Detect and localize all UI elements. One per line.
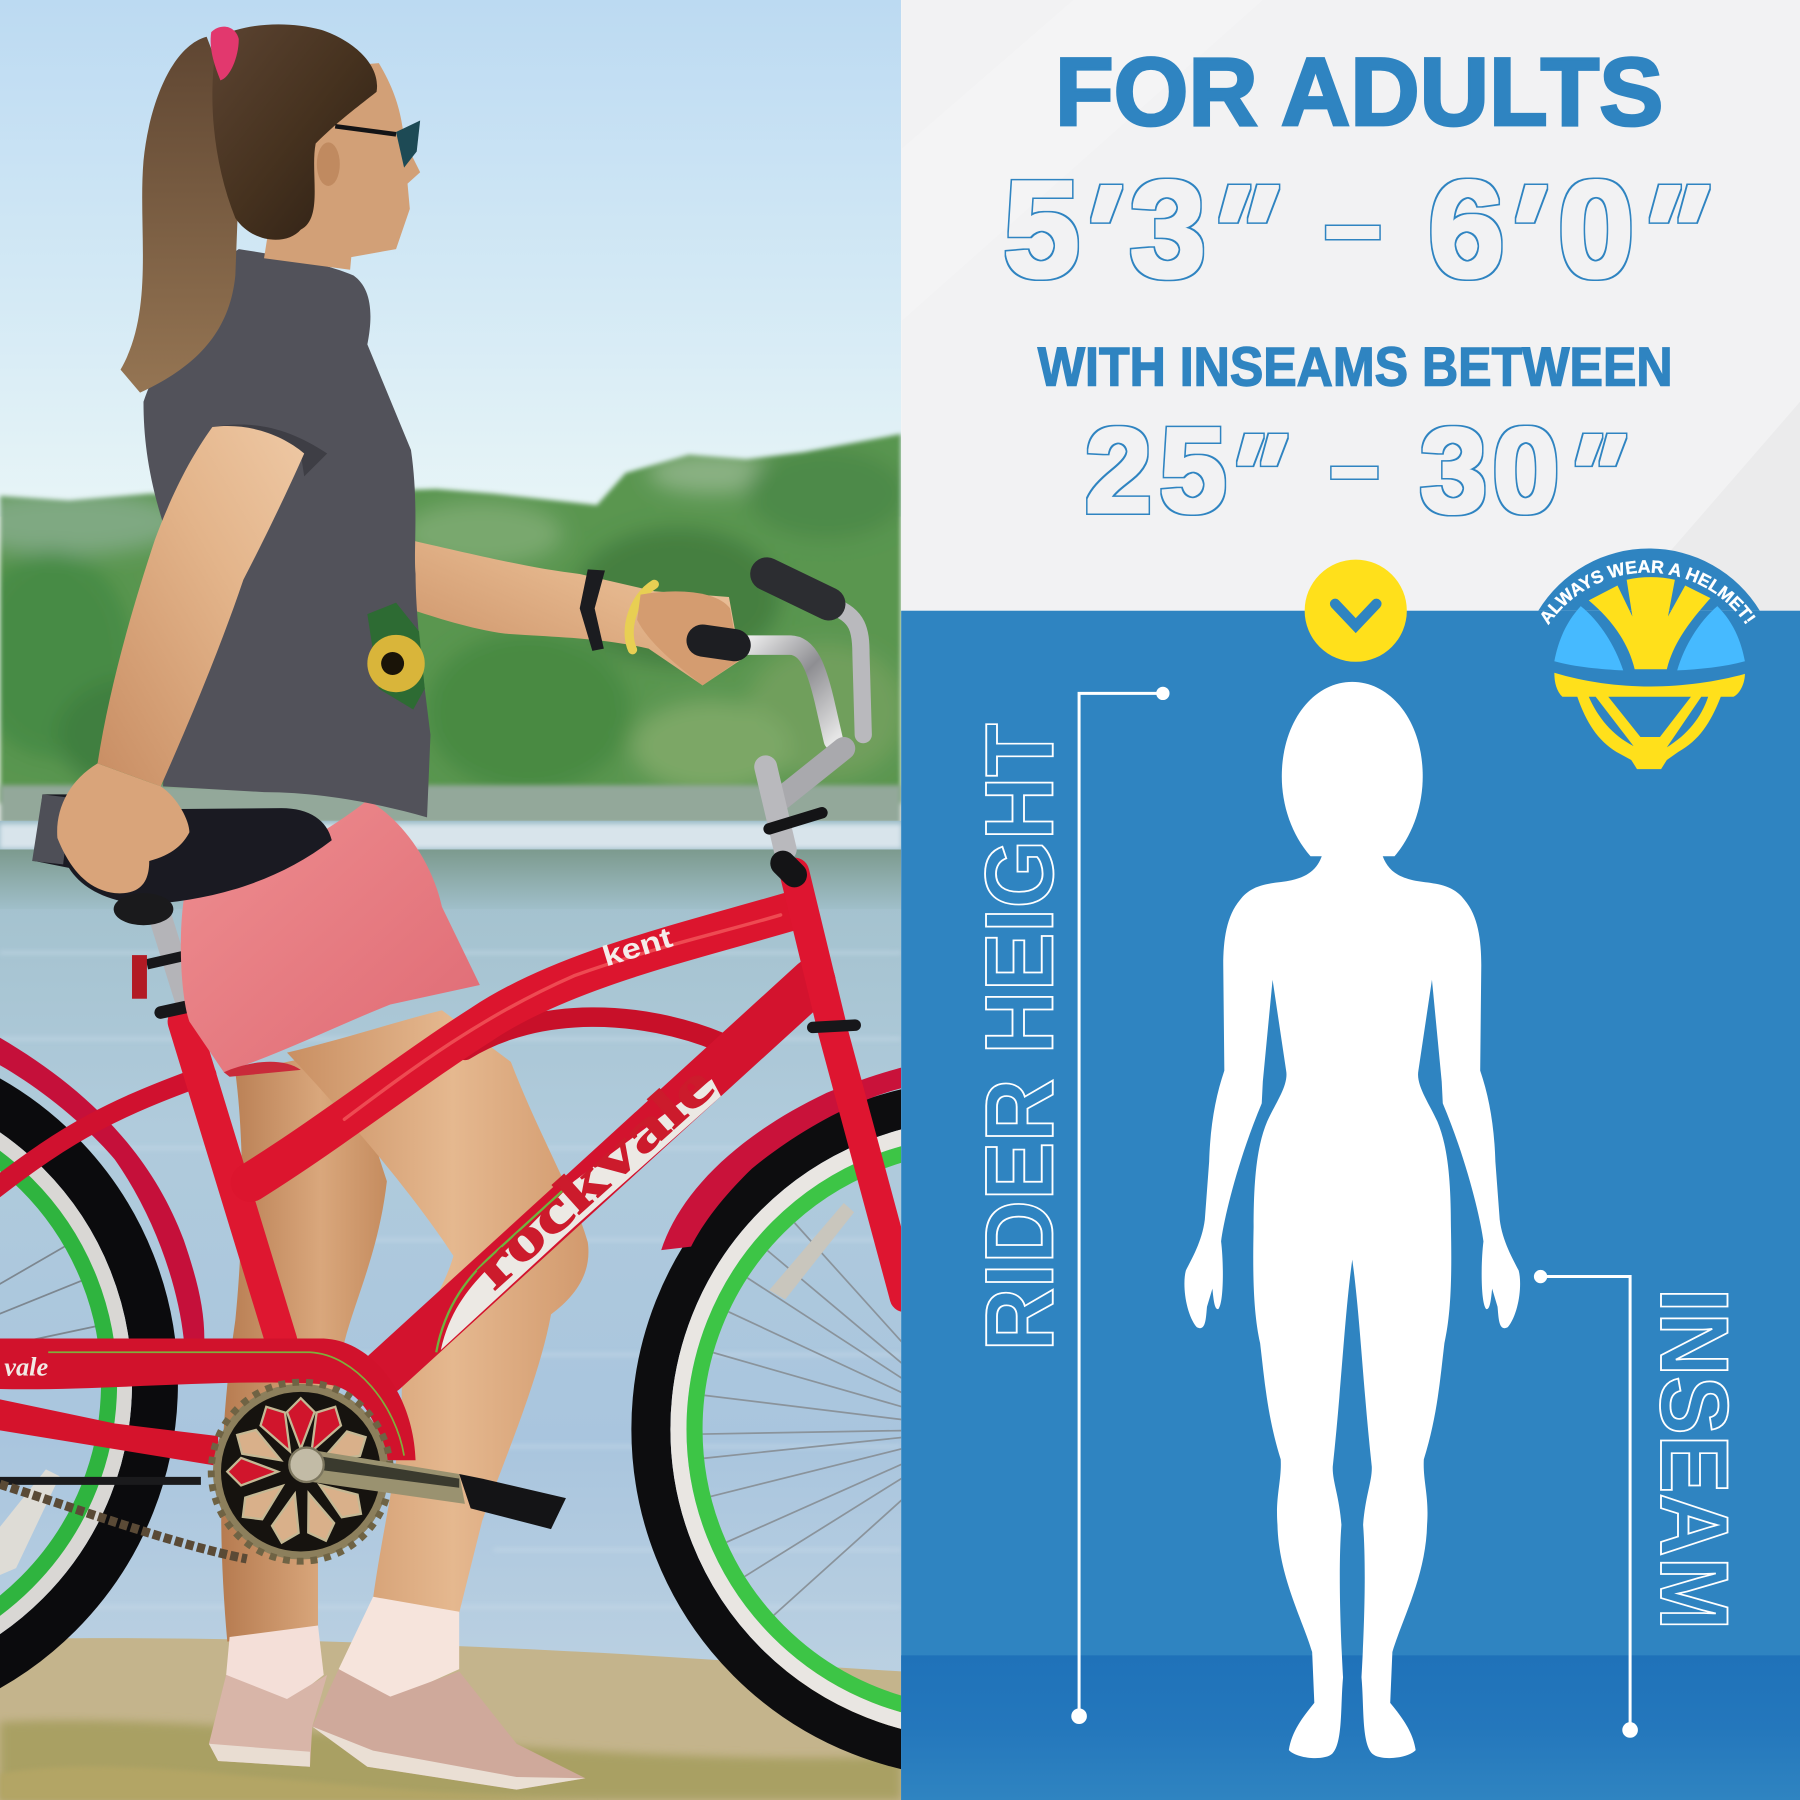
down tube decal [441, 1079, 721, 1350]
shorts [181, 800, 480, 1072]
down tube pinstripe [436, 1182, 572, 1352]
lower chain stay [0, 1399, 218, 1466]
chain guard [0, 1339, 416, 1460]
neck and face [264, 63, 420, 270]
rear wheel [0, 1056, 155, 1710]
head hair [212, 24, 377, 240]
head tube and fork [794, 872, 905, 1297]
chain [0, 1481, 247, 1559]
near shoe [312, 1669, 585, 1790]
rider height marker [1073, 688, 1168, 1723]
bracelet [629, 584, 654, 650]
outlined inseam range: 3 [1420, 403, 1487, 538]
outlined inseam range [1085, 403, 1640, 539]
label: inseam: INSEAM [1640, 1288, 1747, 1630]
inseam marker [1535, 1271, 1636, 1736]
chainring and crank [211, 1382, 566, 1561]
outlined height range: " [1611, 157, 1727, 310]
tree line [0, 425, 907, 815]
far hand [637, 591, 739, 685]
shoreline ground [0, 1638, 901, 1800]
sock near [339, 1597, 459, 1700]
far shore [0, 785, 901, 824]
outlined inseam range: " [1205, 410, 1302, 539]
icon: helmet badge: ALWAYS WEAR A HELMET! [1541, 560, 1756, 626]
seat stay [0, 1074, 207, 1194]
floor band [901, 1655, 1800, 1800]
near hand [57, 763, 189, 893]
outlined inseam range: 0 [1492, 403, 1559, 538]
human silhouette [1184, 682, 1520, 1758]
far shoe [209, 1675, 327, 1767]
saddle [34, 794, 332, 905]
socks [226, 1626, 324, 1704]
top tube [250, 910, 794, 1182]
foreground grass [0, 1767, 597, 1800]
lake water [0, 821, 901, 1705]
icon: helmet badge [1538, 548, 1760, 770]
outlined height range: ' [1055, 157, 1137, 310]
front reflector [769, 1203, 854, 1299]
lower arch tube [465, 1017, 721, 1050]
outlined height range: 6 [1428, 153, 1505, 307]
blue lower background [901, 611, 1800, 1800]
saddle mount [114, 893, 173, 925]
icon: yellow chevron badge [1305, 560, 1407, 662]
badge dome [1538, 548, 1760, 611]
rear reflector [0, 1469, 60, 1575]
outlined height range: – [1325, 169, 1381, 281]
outlined height range: 3 [1130, 153, 1206, 307]
outlined inseam range: 2 [1085, 403, 1152, 538]
near arm [98, 426, 304, 786]
seat post and clamp [132, 918, 224, 1012]
helmet side shells [1554, 606, 1745, 670]
outlined height range: ' [1479, 157, 1562, 310]
seat tube [184, 1022, 281, 1341]
helmet brim and straps [1554, 673, 1745, 769]
subheading: inseams: WITH INSEAMS BETWEEN [1038, 336, 1673, 398]
heading: for adults: FOR ADULTS [1055, 39, 1663, 146]
outlined height range: 5 [1003, 153, 1080, 307]
outlined height range: 0 [1558, 153, 1634, 307]
sunglasses [335, 121, 420, 168]
scrunchie [211, 27, 239, 80]
brand text: kent: kent [599, 922, 677, 973]
ear [317, 142, 340, 186]
stem collar clamp [813, 1025, 855, 1027]
label: rider height: RIDER HEIGHT [967, 723, 1074, 1351]
arc path text [1545, 573, 1749, 630]
sky [0, 0, 901, 517]
rear fender [0, 1038, 204, 1339]
chain guard pinstripe [48, 1352, 404, 1456]
near leg [287, 1010, 588, 1613]
t-shirt [143, 249, 430, 817]
brand text: rockvale: rockvale [460, 1053, 726, 1301]
outlined inseam range: – [1330, 419, 1378, 515]
saddle back highlight [32, 794, 71, 864]
outlined height range [1003, 153, 1727, 310]
shirt sleeve shading [212, 425, 327, 476]
shorts hem [224, 1062, 301, 1077]
handlebar [703, 574, 863, 875]
far arm [408, 540, 740, 685]
brand text: chain guard: vale [4, 1351, 48, 1381]
panel: sizing [901, 0, 1800, 1800]
down tube [385, 982, 813, 1372]
front wheel [631, 1089, 902, 1770]
outlined height range: " [1181, 157, 1296, 310]
outlined inseam range: " [1544, 410, 1640, 539]
bicycle frame [0, 872, 905, 1372]
outlined inseam range: 5 [1159, 403, 1226, 538]
photo panel: rider with red cruiser bike by a lake [0, 0, 902, 1800]
ponytail [121, 37, 241, 393]
sunflower print [367, 603, 425, 709]
front fender [661, 1068, 901, 1250]
light header background [901, 0, 1800, 611]
far leg [221, 1050, 387, 1642]
helmet top [1589, 577, 1710, 669]
wristband [580, 569, 605, 651]
